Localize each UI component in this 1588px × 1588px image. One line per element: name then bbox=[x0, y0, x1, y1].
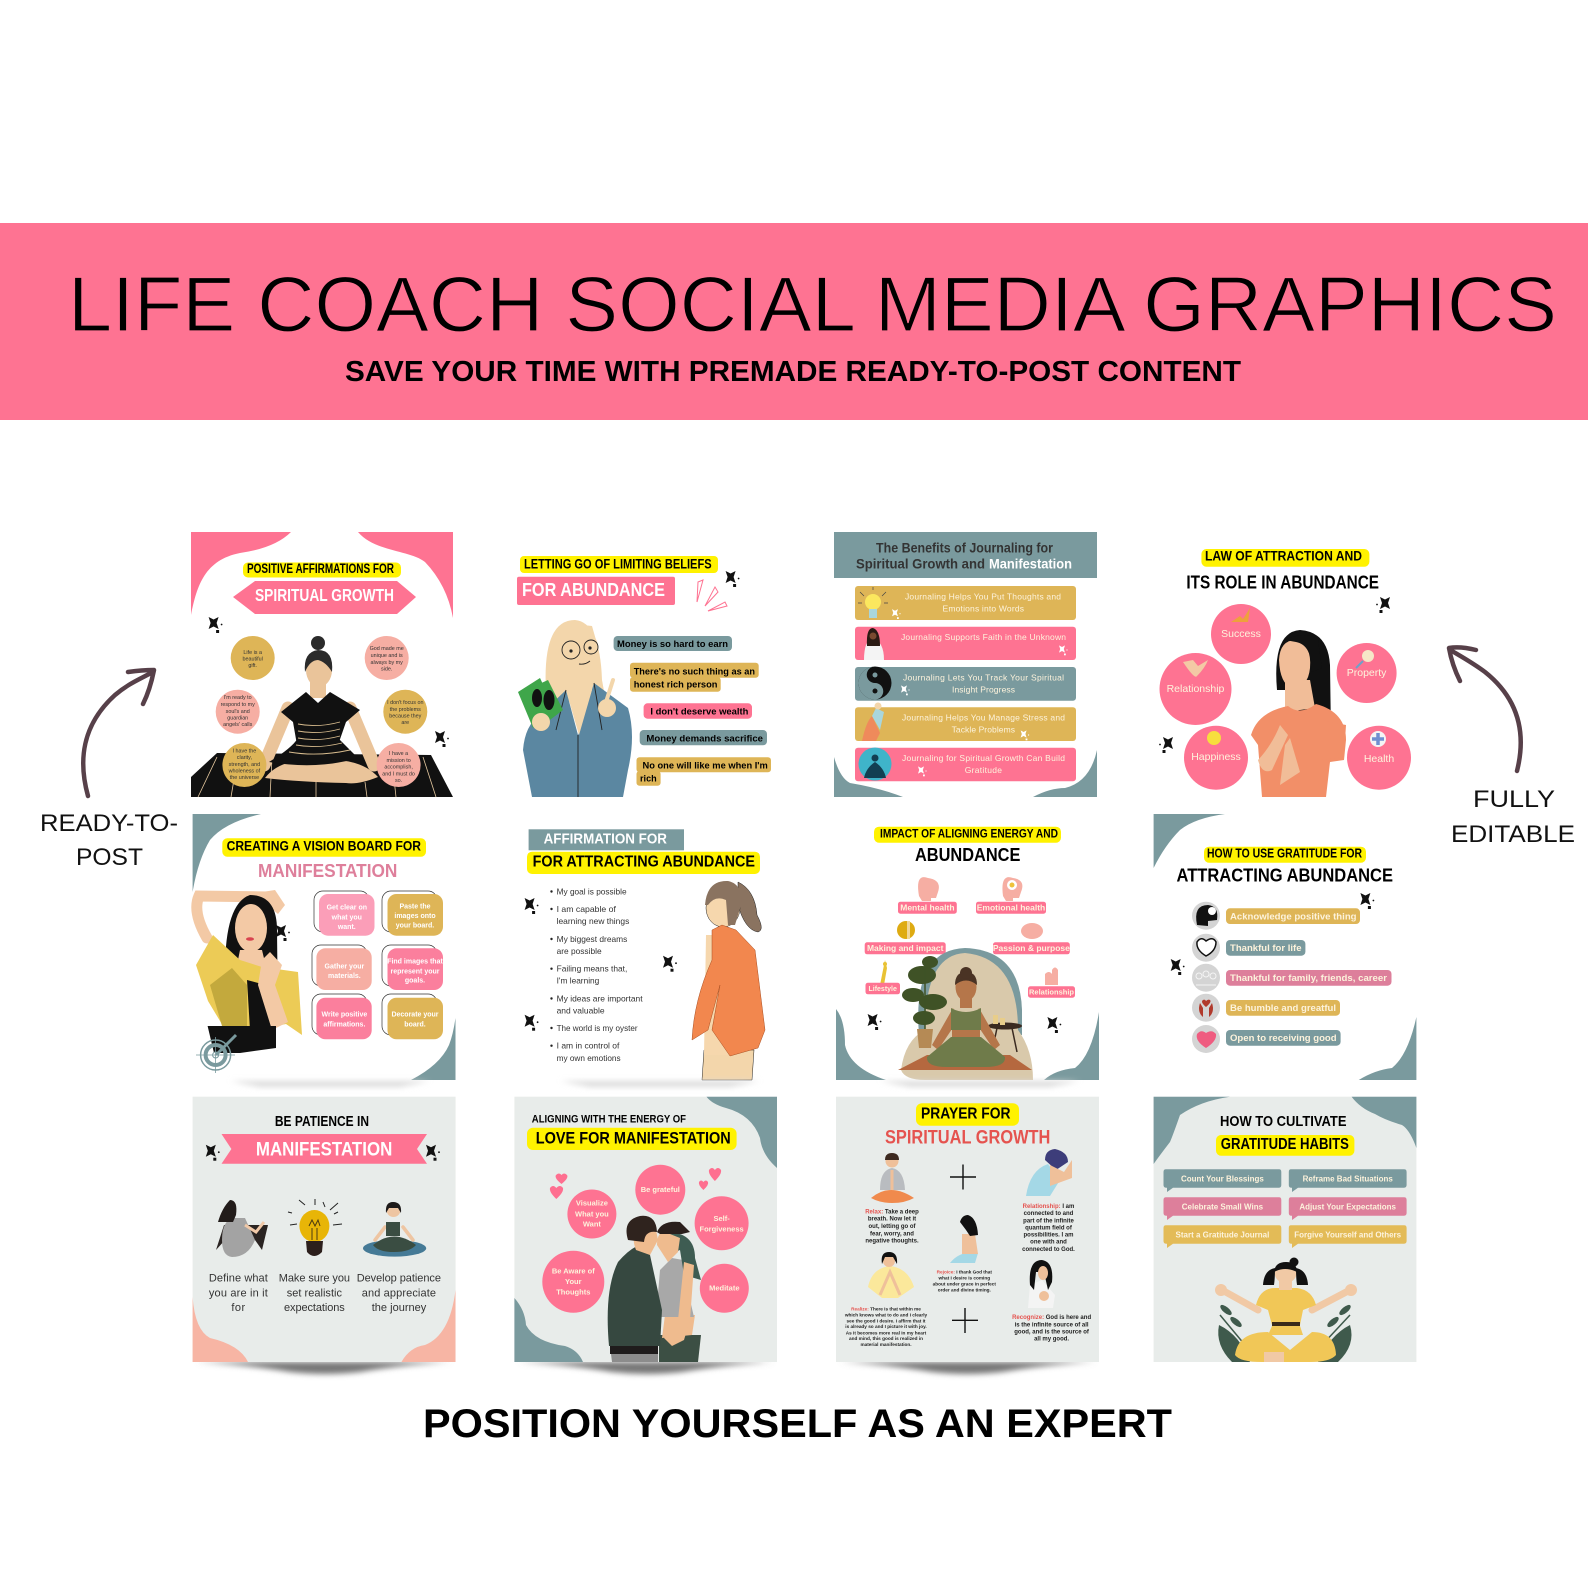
heading: ALIGNING WITH THE ENERGY OF bbox=[532, 1114, 686, 1126]
small white sparkles bbox=[892, 609, 1068, 776]
step captions: set realistic bbox=[287, 1287, 342, 1299]
benefit bars: Journaling for Spiritual Growth Can Build bbox=[902, 753, 1065, 763]
heading: LOVE FOR MANIFESTATION bbox=[536, 1130, 731, 1148]
panel: limiting beliefs bbox=[517, 556, 771, 797]
impact chips: Emotional health bbox=[977, 903, 1045, 913]
affirmation bubbles: angels' calls bbox=[223, 722, 253, 728]
gratitude chips: Thankful for family, friends, career bbox=[1230, 973, 1387, 984]
label: ready-to-post: READY-TO- bbox=[40, 810, 178, 837]
text: recognize: good, and is the source of bbox=[1014, 1330, 1090, 1336]
vision board steps: Write positive bbox=[322, 1012, 367, 1019]
illustration: woman with money bbox=[518, 620, 632, 797]
header: Spiritual Growth and bbox=[856, 556, 985, 572]
vision board steps: Get clear on bbox=[327, 905, 367, 912]
benefit bars: Gratitude bbox=[965, 765, 1002, 775]
icon: glowing meditation bbox=[858, 748, 892, 780]
abundance circles: Happiness bbox=[1191, 751, 1241, 763]
sparkles bbox=[1159, 597, 1390, 753]
text: relationship: connected to and bbox=[1024, 1211, 1074, 1217]
heading: MANIFESTATION bbox=[258, 861, 397, 881]
vision board steps: Gather your bbox=[325, 963, 365, 970]
love circles: Be Aware of bbox=[552, 1267, 595, 1276]
heading: BE PATIENCE IN bbox=[275, 1114, 369, 1130]
ribbon bbox=[222, 1134, 427, 1164]
panel: love for manifestation bbox=[514, 1097, 777, 1362]
sparkles bbox=[525, 898, 677, 1031]
panel: gratitude habits bbox=[1154, 1097, 1416, 1362]
subtitle: SAVE YOUR TIME WITH PREMADE READY-TO-POST CONTENT bbox=[345, 356, 1241, 388]
affirmation list bbox=[550, 886, 643, 1063]
affirmation bubbles: are bbox=[401, 720, 409, 726]
icon: yoga woman bbox=[363, 1202, 426, 1257]
panel: be patience bbox=[193, 1097, 456, 1362]
text: realize: Realize: There is that within me bbox=[851, 1307, 921, 1312]
vision board steps bbox=[312, 891, 443, 1039]
text: relax: out, letting go of bbox=[868, 1224, 916, 1230]
impact icons bbox=[880, 877, 1058, 985]
heading: PRAYER FOR bbox=[921, 1105, 1011, 1122]
text: recognize bbox=[1012, 1315, 1091, 1343]
vision board steps: what you bbox=[331, 915, 362, 922]
affirmation bubbles: strength, and bbox=[229, 762, 260, 768]
affirmation bubbles: I have the bbox=[233, 748, 256, 754]
heading tag bbox=[529, 829, 684, 850]
figure: recognize bbox=[1028, 1260, 1055, 1308]
text: realize bbox=[844, 1307, 928, 1347]
ribbon: MANIFESTATION bbox=[256, 1140, 392, 1161]
panel: affirmation for attracting abundance bbox=[525, 829, 765, 1080]
love circles: What you bbox=[575, 1209, 609, 1218]
affirmation list: My ideas are important bbox=[557, 993, 643, 1003]
illustration: woman in gratitude bbox=[1251, 630, 1346, 797]
label: fully editable bbox=[1451, 786, 1575, 848]
figure: rejoice bbox=[950, 1215, 978, 1263]
benefit bars: Journaling Helps You Manage Stress and bbox=[902, 713, 1065, 723]
vision board steps: affirmations. bbox=[323, 1021, 365, 1028]
figure: realize bbox=[868, 1252, 914, 1298]
sparkle bbox=[276, 925, 290, 941]
title: LIFE COACH SOCIAL MEDIA GRAPHICS bbox=[68, 260, 1557, 348]
illustration: meditating woman with leaves bbox=[1215, 1258, 1357, 1362]
figure: relationship bbox=[1026, 1149, 1072, 1196]
heading: ITS ROLE IN ABUNDANCE bbox=[1186, 572, 1379, 592]
gratitude icons bbox=[1192, 902, 1220, 1053]
illustration: meditating woman bbox=[191, 636, 453, 797]
affirmation bubbles: mission to bbox=[386, 758, 411, 764]
illustration: meditating woman with plant bbox=[898, 948, 1033, 1080]
step captions: for bbox=[231, 1302, 246, 1314]
heading: CREATING A VISION BOARD FOR bbox=[227, 838, 421, 853]
affirmation bubbles: I'm ready to bbox=[224, 695, 252, 701]
affirmation bubbles: accomplish, bbox=[384, 764, 413, 770]
sparkles bbox=[206, 1145, 440, 1161]
affirmation bubbles: side. bbox=[381, 666, 392, 672]
text: relax: breath. Now let it bbox=[868, 1217, 916, 1223]
panel: vision board bbox=[193, 814, 456, 1080]
affirmation bubbles: clarity, bbox=[237, 755, 252, 761]
impact chips: Passion & purpose bbox=[993, 943, 1070, 953]
love circles: Want bbox=[583, 1220, 601, 1229]
subheading: FOR ABUNDANCE bbox=[522, 580, 665, 600]
benefit bars: Journaling Supports Faith in the Unknown bbox=[901, 632, 1066, 642]
vision board steps: Paste the bbox=[399, 903, 431, 910]
heading bbox=[1176, 846, 1393, 886]
belief chips: I don't deserve wealth bbox=[650, 707, 749, 718]
panel: positive affirmations bbox=[191, 532, 453, 797]
text: rejoice: what I desire is coming bbox=[938, 1276, 990, 1281]
love circles: Visualize bbox=[576, 1199, 608, 1208]
habit bubbles: Celebrate Small Wins bbox=[1182, 1203, 1264, 1212]
affirmation bubbles: I have a bbox=[389, 751, 408, 757]
affirmation list: The world is my oyster bbox=[557, 1023, 638, 1033]
plus signs bbox=[950, 1164, 978, 1333]
step captions: the journey bbox=[372, 1302, 427, 1314]
benefit bars: Tackle Problems bbox=[952, 724, 1015, 734]
label: fully editable: EDITABLE bbox=[1451, 821, 1575, 848]
step captions bbox=[209, 1273, 441, 1314]
belief chips: There's no such thing as an bbox=[634, 666, 755, 677]
affirmation list: My goal is possible bbox=[557, 886, 627, 896]
vision board steps: your board. bbox=[396, 922, 434, 929]
abundance circles: Success bbox=[1221, 628, 1261, 640]
step captions: Define what bbox=[209, 1273, 268, 1285]
text: realize: is already so and I picture it with joy. bbox=[845, 1324, 927, 1329]
label: fully editable: FULLY bbox=[1473, 786, 1555, 813]
footer tagline: POSITION YOURSELF AS AN EXPERT bbox=[423, 1402, 1172, 1446]
affirmation bubbles: Life is a bbox=[243, 650, 262, 656]
panel: law of attraction bbox=[1159, 549, 1411, 797]
icon: target bbox=[196, 1035, 236, 1073]
love circles bbox=[542, 1165, 749, 1313]
panel: gratitude for abundance bbox=[1154, 814, 1416, 1080]
vision board steps: Decorate your bbox=[391, 1012, 439, 1019]
sparkles bbox=[868, 1014, 1061, 1033]
step captions: you are in it bbox=[209, 1287, 268, 1299]
heading tag: AFFIRMATION FOR bbox=[544, 831, 667, 847]
vision board steps: materials. bbox=[328, 973, 361, 980]
step captions: expectations bbox=[284, 1302, 345, 1314]
vision board steps: images onto bbox=[394, 913, 436, 920]
icon: light bulb bbox=[288, 1199, 342, 1256]
header: Manifestation bbox=[989, 556, 1072, 572]
header bbox=[834, 532, 1097, 578]
text: rejoice: Rejoice: I thank God that bbox=[937, 1270, 992, 1275]
icon: pink accents bbox=[697, 580, 727, 611]
panel: aligning energy bbox=[836, 826, 1099, 1080]
belief chips: honest rich person bbox=[634, 680, 718, 691]
text: relax: negative thoughts. bbox=[865, 1238, 919, 1244]
love circles: Forgiveness bbox=[700, 1224, 744, 1233]
gratitude chips: Thankful for life bbox=[1230, 943, 1302, 954]
text: relax bbox=[865, 1210, 919, 1244]
belief chips: No one will like me when I'm bbox=[642, 760, 768, 771]
affirmation bubbles: respond to my bbox=[221, 702, 255, 708]
affirmation list: my own emotions bbox=[557, 1053, 621, 1063]
affirmation list: learning new things bbox=[557, 916, 629, 926]
benefit bars: Journaling Helps You Put Thoughts and bbox=[905, 591, 1061, 601]
icon: yin yang bbox=[858, 666, 892, 700]
text: realize: see the good I desire. I affirm that it bbox=[847, 1318, 926, 1323]
heading: SPIRITUAL GROWTH bbox=[885, 1127, 1050, 1148]
love circles: Self- bbox=[713, 1214, 730, 1223]
love circles: Meditate bbox=[709, 1283, 740, 1292]
text: recognize: all my good. bbox=[1034, 1337, 1069, 1343]
icon: woman writing bbox=[216, 1200, 268, 1257]
heading bbox=[874, 826, 1061, 865]
vision board steps: board. bbox=[404, 1021, 426, 1028]
abundance circles: Property bbox=[1347, 667, 1387, 679]
heading: LETTING GO OF LIMITING BELIEFS bbox=[524, 556, 712, 571]
habit bubbles bbox=[1164, 1169, 1407, 1248]
text: relationship: connected to God. bbox=[1022, 1247, 1075, 1253]
text: relationship: quantum field of bbox=[1025, 1225, 1073, 1231]
text: realize: and mind, this good is realized in bbox=[849, 1336, 923, 1341]
heading: FOR ATTRACTING ABUNDANCE bbox=[533, 853, 755, 870]
step captions: Make sure you bbox=[279, 1273, 350, 1285]
step captions: and appreciate bbox=[362, 1287, 436, 1299]
impact chips: Lifestyle bbox=[868, 986, 897, 993]
text: realize: which knows what to do and I clearly bbox=[844, 1312, 928, 1317]
heading bbox=[222, 838, 426, 881]
affirmation list: are possible bbox=[557, 946, 602, 956]
gratitude chips: Acknowledge positive thing bbox=[1230, 911, 1357, 922]
impact chips: Mental health bbox=[900, 903, 955, 913]
illustration: woman in orange jacket bbox=[692, 881, 765, 1080]
affirmation bubbles: and I must do bbox=[382, 772, 415, 778]
banner bbox=[0, 223, 1588, 420]
arrow: right bbox=[1449, 647, 1521, 771]
habit bubbles: Count Your Blessings bbox=[1181, 1175, 1264, 1184]
belief chips bbox=[614, 636, 771, 786]
affirmation bubbles: gift. bbox=[248, 663, 257, 669]
heading bbox=[527, 852, 760, 874]
benefit bars bbox=[855, 586, 1076, 781]
benefit bars: Emotions into Words bbox=[942, 603, 1024, 613]
gratitude chips: Open to receiving good bbox=[1230, 1033, 1337, 1044]
abundance circles: Relationship bbox=[1167, 683, 1225, 695]
vision board steps: Find images that bbox=[387, 958, 443, 965]
habit bubbles: Reframe Bad Situations bbox=[1303, 1175, 1393, 1184]
subheading bbox=[517, 577, 675, 605]
heading: LAW OF ATTRACTION AND bbox=[1205, 549, 1362, 564]
affirmation bubbles: wholeness of bbox=[228, 768, 261, 774]
text: relationship: Relationship: I am bbox=[1023, 1204, 1074, 1210]
heading: HOW TO CULTIVATE bbox=[1220, 1114, 1347, 1130]
text: relax: Relax: Take a deep bbox=[865, 1210, 919, 1216]
vision board steps: goals. bbox=[405, 978, 425, 985]
belief chips: Money demands sacrifice bbox=[646, 733, 763, 744]
heading bbox=[885, 1103, 1050, 1148]
heading: GRATITUDE HABITS bbox=[1221, 1136, 1349, 1153]
belief chips: rich bbox=[640, 774, 657, 785]
sparkles bbox=[1171, 893, 1374, 975]
heading bbox=[1186, 549, 1379, 592]
text: rejoice: order and divine timing. bbox=[938, 1287, 991, 1292]
affirmation bubbles bbox=[216, 636, 427, 787]
sparkles bbox=[209, 617, 449, 747]
text: relationship: one with and bbox=[1030, 1240, 1067, 1246]
love circles: Be grateful bbox=[641, 1185, 680, 1194]
affirmation bubbles: God made me bbox=[370, 646, 404, 652]
text: rejoice: about under grace in perfect bbox=[933, 1281, 996, 1286]
step captions: Develop patience bbox=[357, 1273, 441, 1285]
heading: ABUNDANCE bbox=[915, 845, 1020, 865]
affirmation list: and valuable bbox=[557, 1005, 605, 1015]
habit bubbles: Start a Gratitude Journal bbox=[1176, 1231, 1269, 1240]
affirmation bubbles: because they bbox=[389, 714, 422, 720]
text: relax: fear, worry, and bbox=[870, 1231, 914, 1237]
affirmation bubbles: unique and is bbox=[371, 653, 403, 659]
affirmation bubbles: the problems bbox=[390, 707, 421, 713]
affirmation list: I'm learning bbox=[557, 976, 600, 986]
text: recognize: is the infinite source of all bbox=[1015, 1322, 1089, 1328]
heading: POSITIVE AFFIRMATIONS FOR bbox=[247, 561, 394, 576]
heading: HOW TO USE GRATITUDE FOR bbox=[1207, 846, 1362, 860]
impact chips bbox=[865, 902, 1075, 998]
gratitude chips bbox=[1226, 908, 1392, 1046]
panel: prayer bbox=[836, 1097, 1099, 1362]
text: relationship bbox=[1022, 1204, 1075, 1253]
icon: light bulb bbox=[858, 587, 888, 618]
heading bbox=[527, 1114, 737, 1150]
habit bubbles: Forgive Yourself and Others bbox=[1294, 1231, 1402, 1240]
heading: ATTRACTING ABUNDANCE bbox=[1176, 866, 1393, 886]
affirmation bubbles: so. bbox=[395, 778, 402, 784]
affirmation bubbles: guardian bbox=[227, 716, 248, 722]
affirmation bubbles: soul's and bbox=[226, 709, 250, 715]
vision board steps: want. bbox=[337, 924, 356, 931]
abundance circles: Health bbox=[1364, 753, 1394, 765]
illustration: woman with arm raised bbox=[196, 890, 302, 1053]
affirmation list: Failing means that, bbox=[557, 964, 627, 974]
impact chips: Making and impact bbox=[867, 943, 944, 953]
header: The Benefits of Journaling for bbox=[876, 540, 1053, 556]
text: recognize: Recognize: God is here and bbox=[1012, 1315, 1091, 1321]
habit bubbles: Adjust Your Expectations bbox=[1299, 1203, 1397, 1212]
text: realize: material manifestation. bbox=[860, 1342, 912, 1347]
love circles: Thoughts bbox=[556, 1287, 590, 1296]
belief chips: Money is so hard to earn bbox=[617, 639, 728, 650]
illustration: couple bbox=[608, 1216, 701, 1362]
impact chips: Relationship bbox=[1029, 988, 1074, 997]
affirmation list: I am in control of bbox=[557, 1041, 620, 1051]
label: ready-to-post bbox=[40, 810, 178, 871]
sparkle bbox=[726, 571, 740, 587]
subheading banner: SPIRITUAL GROWTH bbox=[255, 585, 394, 605]
panel: benefits of journaling bbox=[834, 532, 1097, 797]
benefit bars: Journaling Lets You Track Your Spiritual bbox=[903, 672, 1064, 682]
affirmation list: I am capable of bbox=[557, 904, 617, 914]
text: relationship: part of the infinite bbox=[1023, 1218, 1074, 1224]
gratitude chips: Be humble and greatful bbox=[1230, 1003, 1336, 1014]
text: rejoice bbox=[933, 1270, 996, 1292]
affirmation bubbles: always by my bbox=[371, 660, 403, 666]
heading bbox=[1216, 1114, 1354, 1156]
benefit bars: Insight Progress bbox=[952, 684, 1015, 694]
subheading banner bbox=[233, 581, 416, 614]
heading: IMPACT OF ALIGNING ENERGY AND bbox=[880, 826, 1058, 840]
text: relationship: possibilities. I am bbox=[1023, 1233, 1074, 1239]
shadows under panels bbox=[196, 1081, 1096, 1374]
love circles: Your bbox=[565, 1277, 582, 1286]
icon: woman praying bbox=[864, 628, 884, 660]
affirmation list: My biggest dreams bbox=[557, 934, 627, 944]
vision board steps: represent your bbox=[390, 968, 440, 975]
icon: hearts bbox=[550, 1168, 721, 1199]
label: ready-to-post: POST bbox=[76, 844, 143, 871]
affirmation bubbles: the universe bbox=[230, 775, 259, 781]
affirmation bubbles: I don't focus on bbox=[387, 700, 424, 706]
affirmation bubbles: beautiful bbox=[243, 656, 263, 662]
arrow: left bbox=[83, 670, 154, 796]
abundance circles bbox=[1160, 604, 1411, 790]
icon: woman resting bbox=[862, 702, 884, 741]
text: realize: As it becomes more real in my heart bbox=[846, 1330, 927, 1335]
figure: relax bbox=[871, 1153, 914, 1203]
